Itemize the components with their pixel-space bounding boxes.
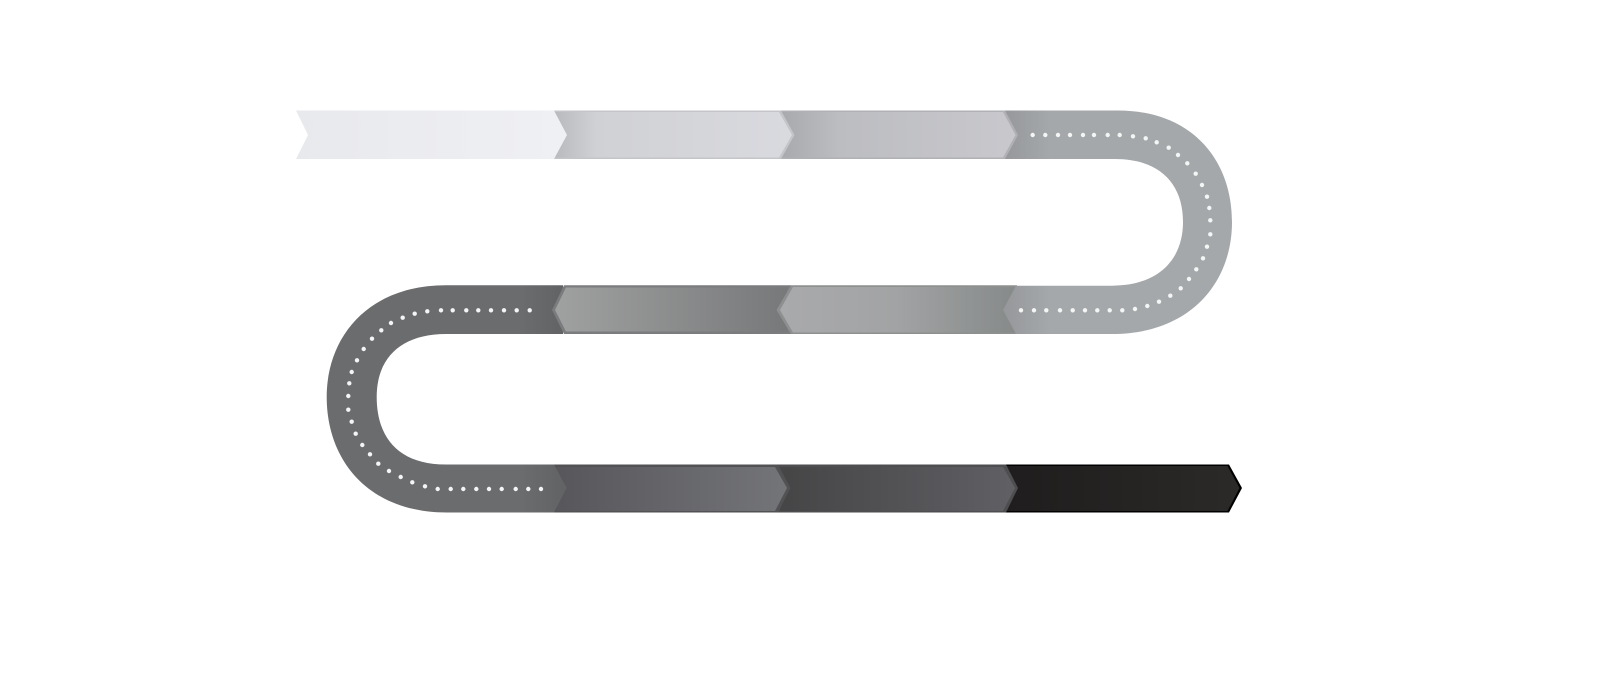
segment 5	[552, 285, 791, 334]
segment 9: arrow head	[1006, 464, 1242, 512]
segment 7	[554, 464, 790, 512]
dotted line: upper right curve	[1019, 133, 1213, 312]
segment 2	[553, 110, 794, 159]
segment 3	[780, 110, 1018, 159]
curve: upper right band	[1003, 110, 1232, 334]
segment 4	[776, 285, 1017, 334]
dotted line: lower left curve	[346, 308, 543, 491]
serpentine arrow	[296, 110, 1242, 512]
segment 1: start	[296, 110, 567, 159]
curve: lower left band	[327, 285, 567, 512]
segment 8	[778, 464, 1018, 512]
